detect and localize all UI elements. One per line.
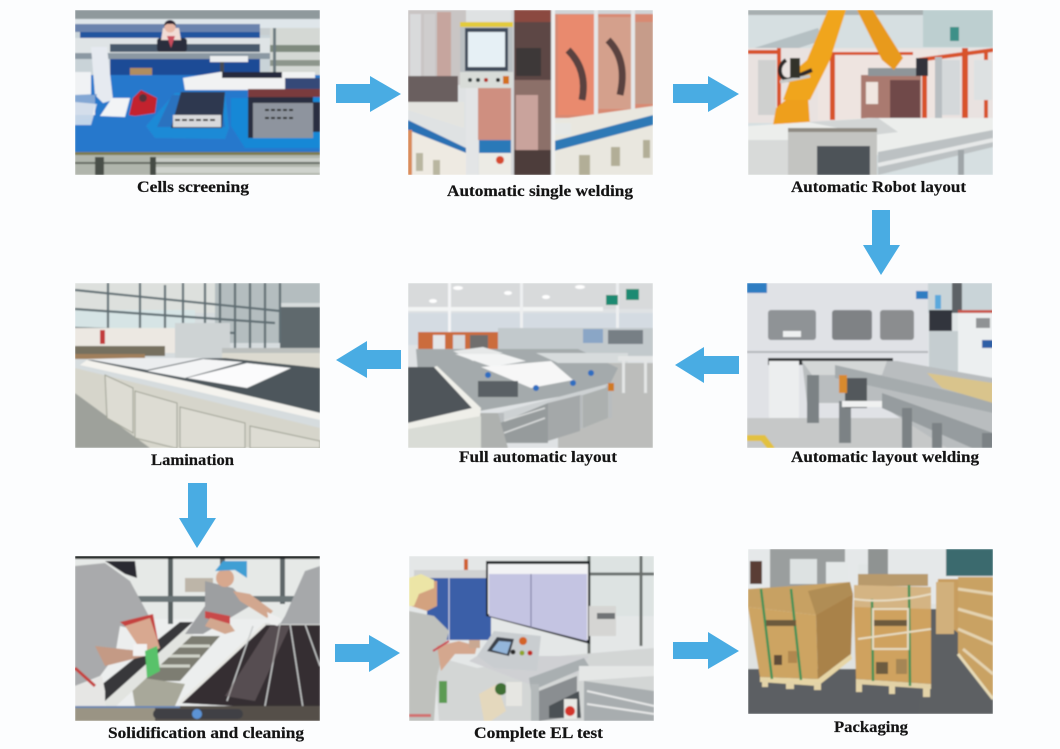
right cabinet	[957, 309, 992, 377]
background machinery	[417, 331, 499, 350]
green bottle	[145, 646, 160, 678]
arrow: cells screening to single welding	[336, 76, 401, 112]
panel: packaging photo	[748, 549, 993, 714]
tray 2	[231, 98, 320, 148]
tape dispenser	[129, 90, 157, 116]
floor	[558, 363, 653, 448]
window grid	[75, 283, 280, 353]
silver frame	[502, 384, 608, 420]
centre worker	[185, 561, 280, 634]
arrow: solidification to EL test	[335, 635, 400, 672]
conveyor	[748, 118, 993, 155]
control panel	[460, 22, 513, 88]
wrapped pallet right	[958, 577, 993, 699]
robot arm	[773, 10, 903, 125]
arrow: lamination down to solidification	[179, 483, 216, 548]
panel: complete EL test photo	[409, 556, 654, 721]
console	[477, 631, 541, 671]
table frame	[75, 153, 320, 175]
white wall	[75, 328, 175, 353]
left windows	[408, 10, 466, 85]
arrow: layout welding to full layout	[675, 347, 739, 383]
arrow: robot layout down to layout welding	[863, 210, 900, 275]
label: automatic robot layout: Automatic Robot layout	[791, 179, 967, 196]
ceiling lights	[429, 285, 585, 303]
post	[934, 56, 943, 118]
label sheet	[479, 684, 506, 721]
right worker	[280, 566, 320, 624]
box left	[748, 582, 853, 690]
machine base	[434, 648, 654, 721]
control box	[788, 128, 877, 175]
dark belt	[87, 358, 320, 413]
box right wrapped	[854, 585, 931, 697]
arrow: EL test to packaging	[673, 632, 739, 669]
frame centre	[466, 88, 478, 175]
floor	[747, 418, 946, 448]
label: automatic layout welding: Automatic layout welding	[791, 449, 979, 466]
right windows	[554, 10, 653, 118]
operator	[409, 574, 480, 721]
right panel	[180, 624, 320, 711]
laminator cabinet	[75, 368, 320, 448]
rear boxes	[936, 579, 973, 644]
arrow: full layout to lamination	[336, 341, 401, 378]
floor	[75, 393, 155, 448]
conveyor mass	[416, 349, 618, 413]
white panels	[87, 358, 203, 370]
dark table	[408, 367, 472, 423]
tray 1	[146, 93, 229, 139]
label: complete EL test: Complete EL test	[474, 725, 604, 742]
EL screen	[486, 561, 590, 644]
safety fence	[748, 48, 993, 128]
white tube	[91, 47, 113, 103]
panel: automatic robot layout photo	[748, 10, 993, 175]
panel: full automatic layout photo	[408, 283, 653, 448]
blue table	[75, 75, 320, 153]
panel: lamination photo	[75, 283, 320, 448]
left worker	[75, 561, 160, 721]
rollers	[130, 636, 220, 681]
panel: automatic single welding photo	[408, 10, 653, 175]
conveyors	[802, 361, 993, 448]
arrow: single welding to robot layout	[673, 76, 739, 112]
label: packaging: Packaging	[834, 719, 908, 736]
label: solidification and cleaning: Solidification and cleaning	[108, 725, 304, 742]
stacked papers	[183, 72, 315, 90]
panel: cells screening photo	[75, 10, 320, 175]
left panel	[100, 623, 197, 709]
label: full automatic layout: Full automatic layout	[459, 449, 618, 466]
panel: automatic layout welding photo	[747, 283, 993, 448]
floor	[748, 669, 993, 714]
machine body	[747, 283, 929, 366]
solar panel back	[414, 570, 491, 640]
dark red centre	[513, 20, 552, 82]
player bar	[75, 706, 320, 721]
label: cells screening: Cells screening	[137, 179, 249, 196]
operator	[157, 20, 187, 52]
panel: solidification and cleaning photo	[75, 556, 320, 721]
label: automatic single welding: Automatic single welding	[447, 183, 633, 200]
label: lamination: Lamination	[151, 452, 234, 469]
